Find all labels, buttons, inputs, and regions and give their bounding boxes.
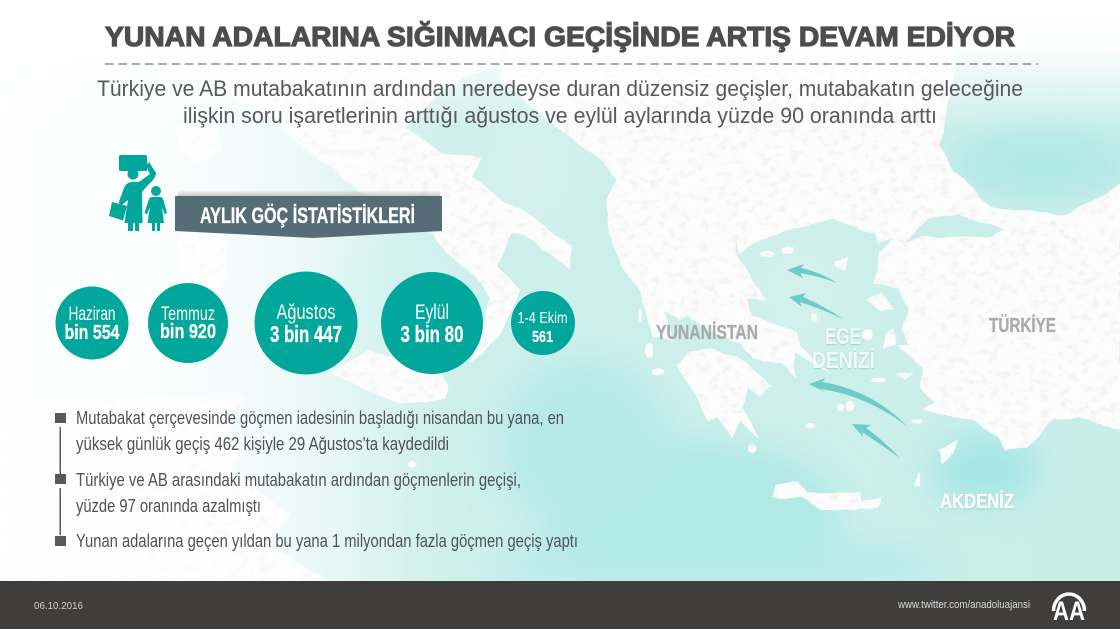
circle: Ağustos: Ağustos [276, 301, 336, 324]
circle: Haziran: bin 554 [64, 322, 120, 344]
map label: Ege Denizi: EGE [825, 323, 861, 349]
bullet list: Türkiye ve AB arasındaki mutabakatın ardından göçmenlerin geçişi, [76, 469, 521, 490]
circle: Temmuz: bin 920 [160, 321, 216, 343]
icon: Anadolu Agency logo: AA [1053, 596, 1085, 626]
map label: Ege Denizi: DENİZİ [812, 347, 875, 373]
circle: Ağustos [254, 272, 358, 374]
subtitle: ilişkin soru işaretlerinin arttığı ağustos ve eylül aylarında yüzde 90 oranında arttı [183, 103, 937, 128]
bullet list: Mutabakat çerçevesinde göçmen iadesinin başladığı nisandan bu yana, en [76, 407, 564, 428]
map label: Akdeniz: AKDENİZ [940, 490, 1014, 513]
arrow: north Aegean upper [787, 264, 837, 283]
bullet list: Yunan adalarına geçen yıldan bu yana 1 milyondan fazla göçmen geçiş yaptı [76, 530, 578, 551]
bullet list: yüksek günlük geçiş 462 kişiyle 29 Ağustos'ta kaydedildi [76, 433, 449, 454]
date: 06.10.2016 [34, 601, 83, 612]
circle: Temmuz: Temmuz [161, 304, 215, 325]
subtitle [97, 76, 1023, 128]
circle: Haziran [56, 286, 128, 360]
circle: Haziran: Haziran [68, 304, 116, 325]
map label: Türkiye: TÜRKİYE [989, 314, 1056, 337]
arrow: central Aegean [809, 378, 908, 427]
circle: Eylül: Eylül [415, 301, 449, 324]
circle: Eylül [381, 272, 483, 374]
arrow: south Aegean [852, 424, 900, 458]
map label: Ege Denizi [812, 323, 875, 373]
map label: Yunanistan: YUNANİSTAN [656, 321, 758, 344]
twitter address: www.twitter.com/anadoluajansi [897, 599, 1030, 611]
bullet list: yüzde 97 oranında azalmıştı [76, 495, 261, 516]
circle: 1-4 Ekim [511, 291, 575, 355]
circle: 1-4 Ekim: 561 [532, 329, 553, 346]
title: YUNAN ADALARINA SIĞINMACI GEÇİŞİNDE ARTIŞ DEVAM EDİYOR [105, 21, 1015, 52]
circle: Eylül: 3 bin 80 [400, 321, 464, 347]
circle: 1-4 Ekim: 1-4 Ekim [518, 310, 568, 327]
bullet list [55, 407, 578, 551]
subtitle: Türkiye ve AB mutabakatının ardından neredeyse duran düzensiz geçişler, mutabakatın geleceğine [97, 76, 1023, 101]
banner: monthly migration statistics [175, 190, 442, 238]
circle: Ağustos: 3 bin 447 [270, 321, 342, 347]
circle: Temmuz [148, 283, 228, 363]
arrow: north Aegean lower [789, 293, 843, 319]
banner: monthly migration statistics: AYLIK GÖÇ İSTATİSTİKLERİ [200, 203, 415, 228]
footer bar [0, 581, 1120, 629]
icon: woman and child [109, 155, 167, 231]
